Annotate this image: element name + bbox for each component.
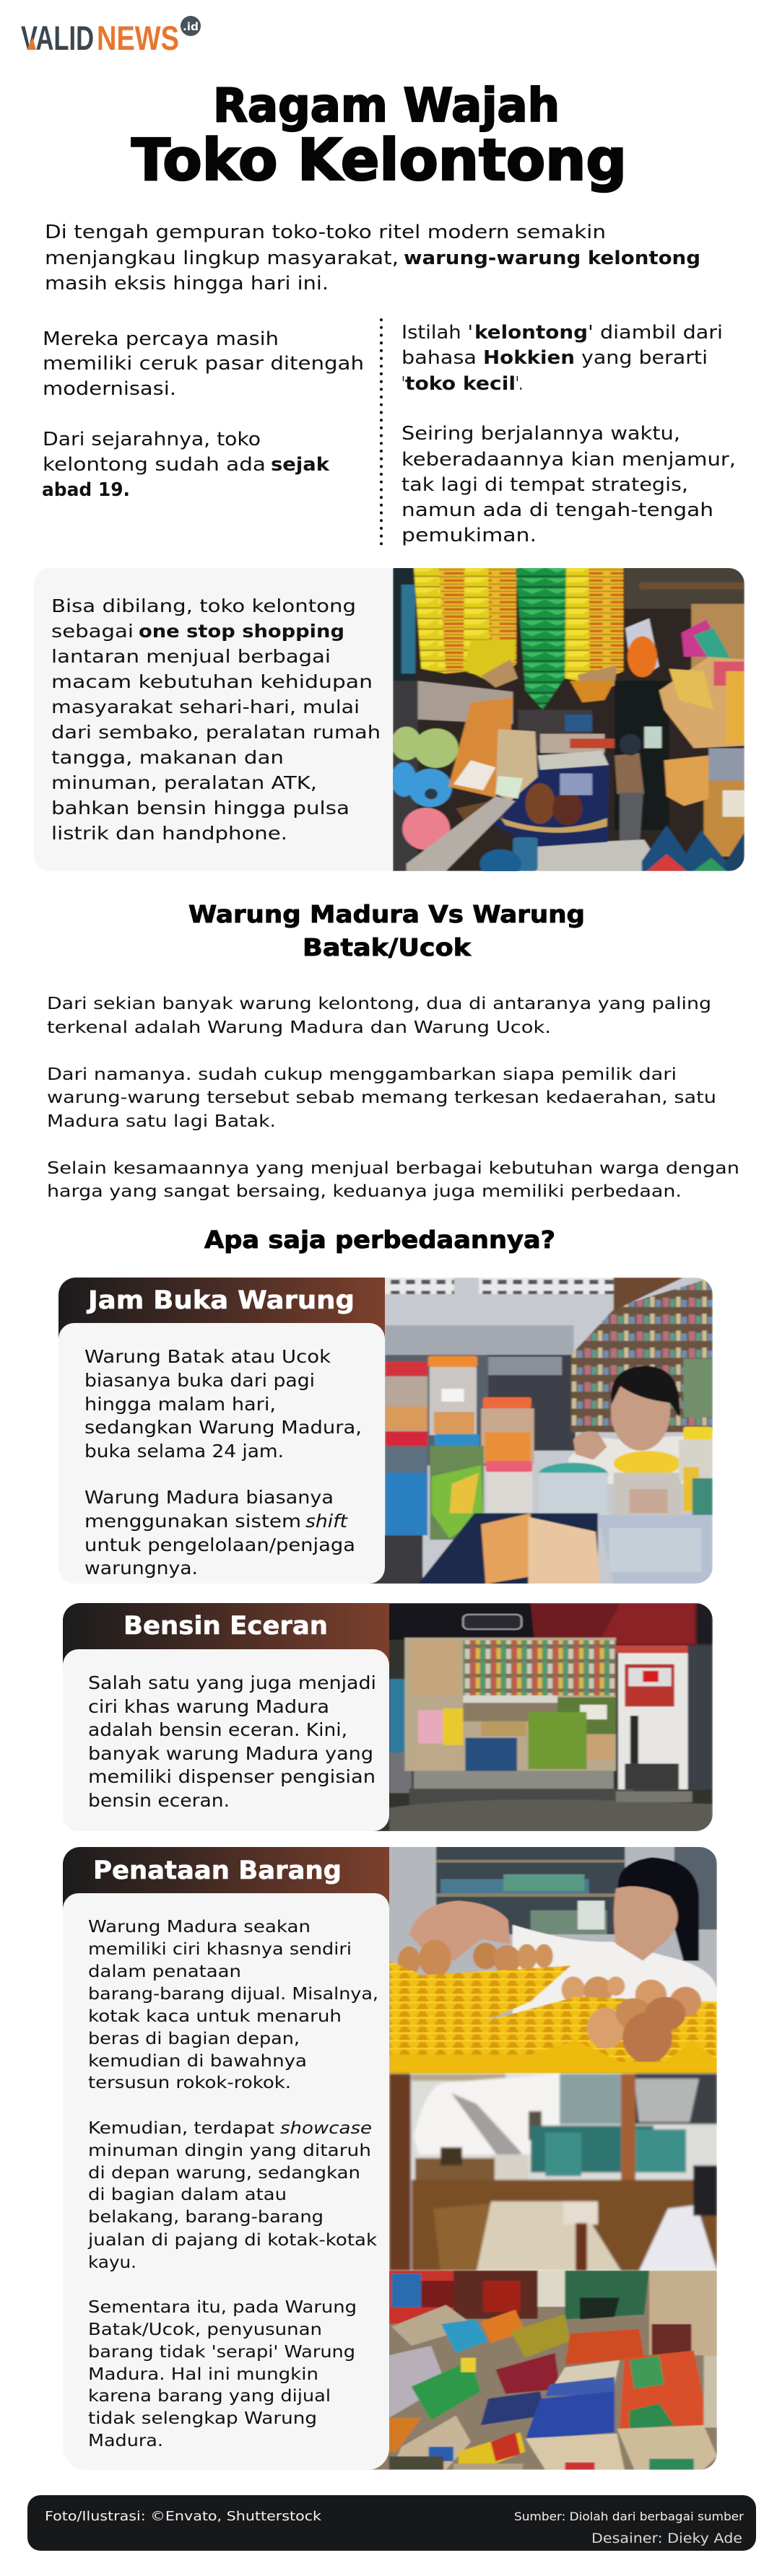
intro paragraph (45, 222, 700, 294)
designer credit: Desainer: Dieky Ade (591, 2531, 742, 2546)
card: bensin eceran (63, 1603, 713, 1831)
photo: hanging goods at a kelontong shop (391, 568, 745, 878)
right column text: toko kecil (405, 373, 516, 395)
text: one stop shopping: dari sembako, peralatan rumah (51, 722, 381, 743)
heading: Warung Madura vs Warung Batak: Warung Madura Vs Warung (188, 900, 585, 928)
right column text: tak lagi di tempat strategis, (401, 474, 688, 496)
card body text: banyak warung Madura yang (88, 1743, 373, 1764)
card body text: tersusun rokok-rokok. (88, 2074, 291, 2092)
right column text: namun ada di tengah-tengah (401, 499, 713, 521)
logo: Validnews.id (21, 16, 201, 57)
card body text (88, 1672, 376, 1811)
card body text: di depan warung, sedangkan (88, 2164, 360, 2183)
body text: warung madura and ucok: Dari namanya. sudah cukup menggambarkan siapa pemilik dari (47, 1064, 677, 1084)
card body text: Madura. Hal ini mungkin (88, 2365, 318, 2384)
body text: warung madura and ucok: terkenal adalah Warung Madura dan Warung Ucok. (47, 1017, 551, 1037)
card body text: Sementara itu, pada Warung (88, 2298, 357, 2317)
right column text: bahasa (401, 347, 477, 369)
body text: warung madura and ucok: Selain kesamaannya yang menjual berbagai kebutuhan warga dengan (47, 1158, 739, 1178)
right column text: pemukiman. (401, 525, 537, 546)
card body text: karena barang yang dijual (88, 2387, 331, 2406)
right column text: kelontong (474, 322, 588, 344)
card title: Jam Buka Warung (87, 1286, 355, 1315)
card title: Penataan Barang (93, 1856, 342, 1885)
left column text: sejak (271, 454, 330, 476)
text: one stop shopping: lantaran menjual berbagai (51, 646, 331, 667)
right column text: '. (516, 373, 523, 395)
left column text: Mereka percaya masih (43, 328, 279, 350)
right column text: yang berarti (581, 347, 708, 369)
photo: pouring sugar on old scale (389, 2074, 717, 2271)
card body text: hingga malam hari, (84, 1394, 276, 1415)
card: penataan barang (63, 1846, 717, 2470)
photo: warung with fuel dispenser (351, 1603, 713, 1831)
card body text: memiliki ciri khasnya sendiri (88, 1940, 352, 1959)
right column text: keberadaannya kian menjamur, (401, 449, 736, 471)
card body text: Warung Madura biasanya (84, 1487, 334, 1508)
text: one stop shopping: sebagai (51, 621, 134, 642)
card body text: beras di bagian depan, (88, 2030, 300, 2048)
left column text: memiliki ceruk pasar ditengah (43, 353, 364, 375)
panel: one stop shopping (34, 568, 745, 878)
text: one stop shopping: listrik dan handphone. (51, 823, 287, 844)
intro paragraph: warung-warung kelontong (404, 248, 700, 269)
card body text: biasanya buka dari pagi (84, 1370, 315, 1391)
right column text (401, 322, 736, 546)
text: one stop shopping: one stop shopping (139, 621, 344, 642)
body text: warung madura and ucok: Dari sekian banyak warung kelontong, dua di antaranya yang paling (47, 993, 711, 1013)
header: penataan barang (63, 1847, 389, 1920)
card body text: sedangkan Warung Madura, (84, 1417, 362, 1438)
body text: warung madura and ucok: warung-warung tersebut sebab memang terkesan kedaerahan, satu (47, 1087, 716, 1107)
photos: eggs, sugar and snack boxes (347, 1846, 717, 2470)
card body text: ciri khas warung Madura (88, 1696, 329, 1717)
text: one stop shopping: macam kebutuhan kehidupan (51, 671, 373, 692)
card body text (84, 1346, 362, 1579)
card body text: Batak/Ucok, penyusunan (88, 2320, 322, 2339)
text: one stop shopping: bahkan bensin hingga pulsa (51, 798, 350, 818)
header: bensin eceran (63, 1603, 389, 1675)
card body text: Kemudian, terdapat (88, 2119, 274, 2138)
card body text: Warung Madura seakan (88, 1918, 311, 1937)
photo: snacks in cardboard boxes (347, 2271, 717, 2470)
body text: warung madura and ucok (47, 993, 739, 1201)
card body text: showcase (280, 2119, 372, 2138)
logo: Validnews.id: VALID (21, 19, 94, 57)
text: one stop shopping: minuman, peralatan ATK, (51, 772, 317, 793)
right column text: Seiring berjalannya waktu, (401, 423, 680, 445)
card body text: di bagian dalam atau (88, 2186, 287, 2204)
header: jam buka warung (58, 1278, 385, 1350)
right column text: ' (401, 373, 405, 395)
text panel (63, 1893, 389, 2470)
text: one stop shopping: tangga, makanan dan (51, 747, 284, 768)
card body text: kemudian di bawahnya (88, 2052, 307, 2071)
left column text: abad 19. (42, 479, 130, 501)
card body text: warungnya. (84, 1558, 198, 1579)
heading: Warung Madura vs Warung Batak: Batak/Ucok (303, 933, 472, 961)
card body text: minuman dingin yang ditaruh (88, 2141, 371, 2160)
card: jam buka warung (58, 1278, 713, 1584)
card body text: dalam penataan (88, 1962, 241, 1981)
card body text: barang tidak 'serapi' Warung (88, 2343, 355, 2362)
text panel (63, 1649, 389, 1831)
card body text: menggunakan sistem (84, 1511, 301, 1532)
card body text: barang-barang dijual. Misalnya, (88, 1985, 378, 2004)
text: one stop shopping: masyarakat sehari-hari, mulai (51, 697, 360, 717)
text panel (58, 1323, 385, 1584)
footer: credits (27, 2495, 756, 2551)
intro paragraph: Di tengah gempuran toko-toko ritel modern semakin (45, 222, 606, 243)
left column text: kelontong sudah ada (43, 454, 266, 476)
logo: Validnews.id: NEWS (97, 19, 179, 57)
photo credit: Foto/Ilustrasi: ©Envato, Shutterstock (45, 2509, 322, 2524)
card body text: shift (305, 1511, 349, 1532)
card body text: Madura. (88, 2432, 163, 2450)
card body text: tidak selengkap Warung (88, 2409, 317, 2428)
card body text: kayu. (88, 2253, 136, 2272)
card body text: buka selama 24 jam. (84, 1441, 284, 1462)
right column text: Istilah ' (401, 322, 473, 344)
card body text: adalah bensin eceran. Kini, (88, 1719, 347, 1740)
left column text (42, 328, 364, 501)
text: one stop shopping (51, 595, 381, 844)
card body text: Warung Batak atau Ucok (84, 1346, 331, 1367)
card body text: memiliki dispenser pengisian (88, 1766, 376, 1787)
left column text: Dari sejarahnya, toko (43, 429, 261, 450)
card body text: Salah satu yang juga menjadi (88, 1672, 376, 1693)
heading: Warung Madura vs Warung Batak (188, 900, 585, 961)
card body text: untuk pengelolaan/penjaga (84, 1534, 355, 1555)
title: Toko Kelontong (131, 127, 627, 193)
card body text: belakang, barang-barang (88, 2208, 324, 2227)
card body text: jualan di pajang di kotak-kotak (87, 2231, 378, 2250)
card body text (87, 1918, 378, 2450)
body text: warung madura and ucok: harga yang sangat bersaing, keduanya juga memiliki perbedaan. (47, 1181, 682, 1201)
title (131, 79, 627, 193)
text: one stop shopping: Bisa dibilang, toko kelontong (51, 595, 356, 616)
subheading: perbedaan: Apa saja perbedaannya? (204, 1226, 555, 1254)
right column text: Hokkien (483, 347, 575, 369)
card body text: kotak kaca untuk menaruh (88, 2007, 342, 2026)
right column text: ' diambil dari (588, 322, 723, 344)
photo: shopkeeper behind jars (351, 1278, 713, 1584)
card title: Bensin Eceran (123, 1612, 328, 1641)
logo: Validnews.id: .id (183, 20, 199, 33)
intro paragraph: masih eksis hingga hari ini. (45, 273, 329, 294)
title: Ragam Wajah (213, 79, 560, 133)
body text: warung madura and ucok: Madura satu lagi Batak. (47, 1111, 276, 1131)
intro paragraph: menjangkau lingkup masyarakat, (45, 248, 399, 269)
photo: woman arranging eggs (389, 1847, 717, 2074)
source credit: Sumber: Diolah dari berbagai sumber (514, 2510, 744, 2523)
card body text: bensin eceran. (88, 1790, 230, 1811)
left column text: modernisasi. (43, 378, 176, 400)
